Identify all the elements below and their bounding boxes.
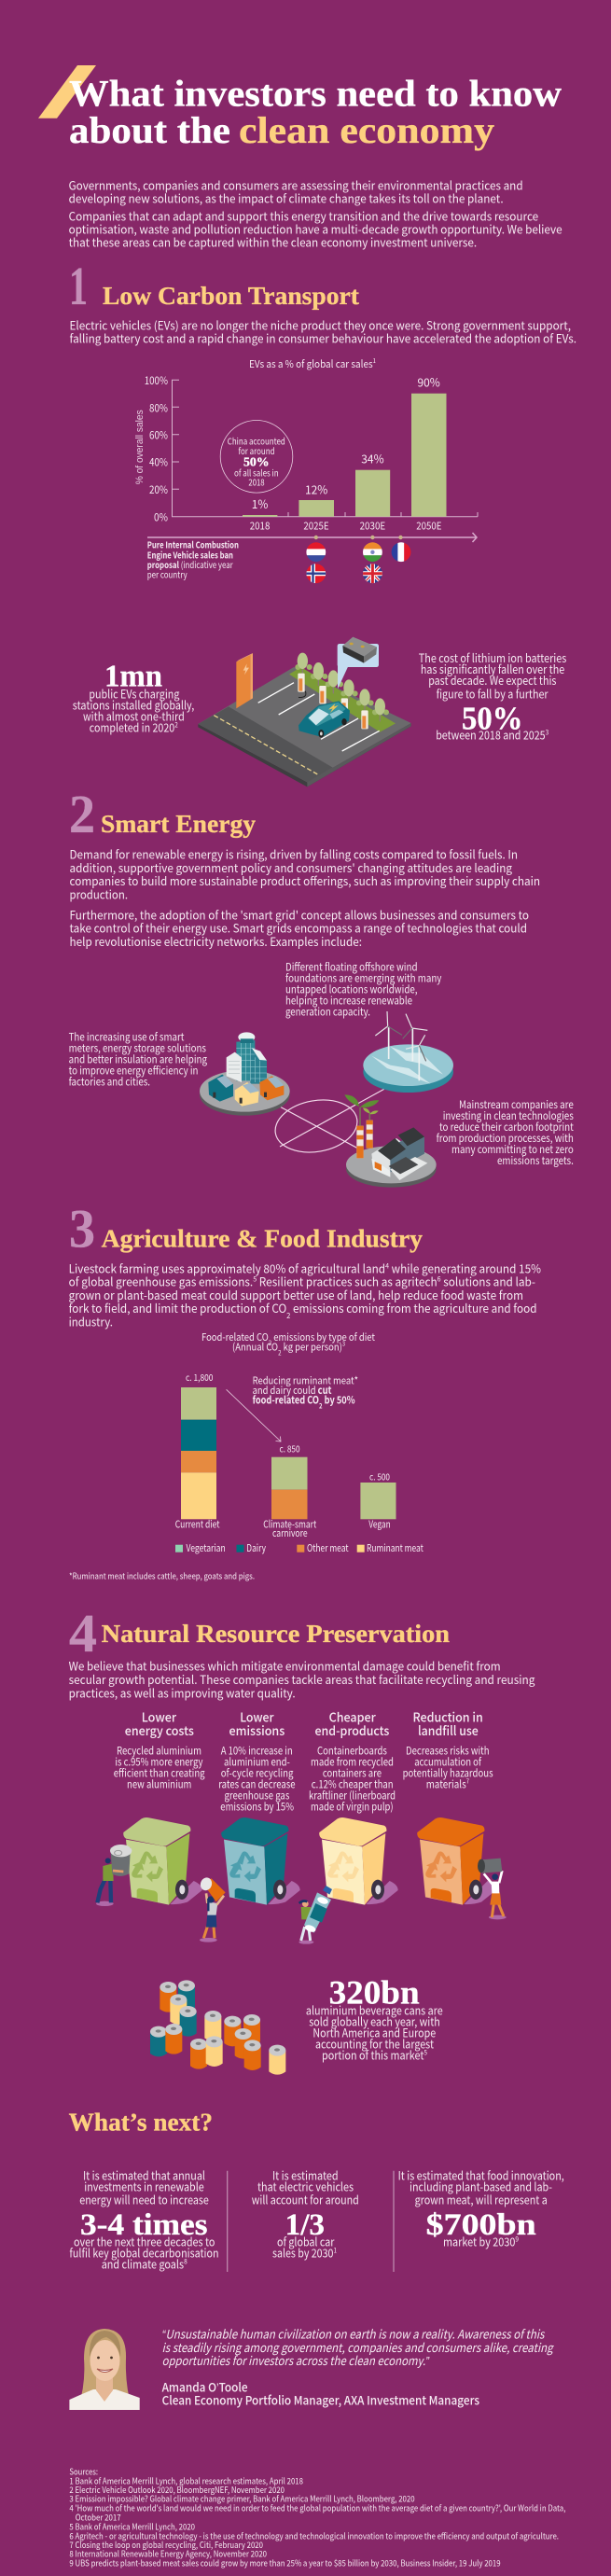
icon: person with grey can bbox=[478, 1859, 507, 1919]
callout: mainstream companies: to reduce their carbon footprint bbox=[439, 1120, 574, 1135]
y axis labels bbox=[145, 373, 168, 524]
ban proposal note: Engine Vehicle sales ban bbox=[147, 548, 233, 561]
quote: Amanda O’Toole bbox=[162, 2377, 248, 2395]
icon: orange bin bbox=[417, 1817, 496, 1905]
stat: beverage cans: sold globally each year, with bbox=[309, 2012, 440, 2029]
section text bbox=[69, 315, 576, 346]
callout: China share: 2018 bbox=[248, 476, 265, 489]
icon: drink cans bbox=[150, 1980, 285, 2075]
sources bbox=[69, 2465, 565, 2569]
column: food innovation: including plant-based and lab- bbox=[410, 2178, 552, 2195]
section text: Furthermore, the adoption of the 'smart grid' concept allows businesses and consumers to bbox=[69, 906, 529, 924]
stat: battery cost bbox=[419, 648, 566, 743]
column: food innovation: It is estimated that food innovation, bbox=[398, 2166, 564, 2184]
callout: China share bbox=[220, 420, 293, 493]
callout: mainstream companies bbox=[437, 1097, 574, 1168]
callout: offshore wind: helping to increase renewable bbox=[285, 993, 412, 1008]
section text: We believe that businesses which mitigate environmental damage could benefit from bbox=[69, 1657, 501, 1675]
column: reduction in landfill use: landfill use bbox=[418, 1720, 479, 1739]
sources: October 2017 bbox=[76, 2512, 121, 2524]
callout: China share: of all sales in bbox=[234, 466, 279, 479]
title slash bbox=[38, 65, 96, 118]
section 1: low carbon transport bbox=[69, 256, 576, 2569]
section 3: agriculture and food bbox=[69, 1199, 541, 1581]
bar values: 90% bbox=[418, 372, 440, 390]
column: cheaper end-products bbox=[309, 1707, 396, 1815]
flag: Netherlands bbox=[306, 542, 326, 563]
column: lower energy costs bbox=[114, 1707, 205, 1792]
header bbox=[38, 65, 562, 251]
column: food innovation: $700bn bbox=[426, 2208, 536, 2242]
column: cheaper end-products: c.12% cheaper than bbox=[312, 1777, 394, 1792]
callout: smart meters: meters, energy storage solutions bbox=[69, 1041, 206, 1056]
column: reduction in landfill use: Reduction in bbox=[412, 1707, 483, 1726]
bar: vegan bbox=[360, 1483, 396, 1519]
column: cheaper end-products: containers are bbox=[323, 1766, 382, 1781]
axes bbox=[172, 380, 478, 517]
column: lower emissions: greenhouse gas bbox=[224, 1789, 289, 1803]
intro text bbox=[69, 175, 562, 251]
icon: person with can bbox=[96, 1845, 132, 1906]
stat: charging stations: with almost one-third bbox=[83, 706, 185, 724]
city disc bbox=[200, 1032, 290, 1116]
column: reduction in landfill use bbox=[403, 1707, 493, 1792]
callout: offshore wind: generation capacity. bbox=[285, 1004, 370, 1019]
callout: China share: 50% bbox=[243, 456, 270, 470]
section number 1: 1 bbox=[69, 256, 88, 316]
column: reduction in landfill use: accumulation of bbox=[414, 1755, 482, 1770]
stat: charging stations: 1mn bbox=[104, 660, 162, 694]
bar labels: Current diet bbox=[175, 1517, 220, 1532]
column: lower energy costs: new aluminium bbox=[127, 1777, 191, 1792]
intro text: that these areas can be captured within the clean economy investment universe. bbox=[69, 233, 477, 251]
column: lower energy costs: efficient than creating bbox=[114, 1766, 205, 1781]
stat: charging stations: public EVs charging bbox=[89, 684, 179, 702]
ban proposal note: per country bbox=[147, 568, 187, 581]
callout: smart meters: to improve energy efficiency in bbox=[69, 1064, 198, 1079]
year labels: 2018 bbox=[250, 518, 270, 533]
column: lower emissions: rates can decrease bbox=[218, 1777, 296, 1792]
sources: 3 Emission impossible? Global climate change primer, Bank of America Merrill Lynch, Bloomberg, 2020 bbox=[69, 2493, 415, 2505]
callout: mainstream companies: emissions targets. bbox=[497, 1153, 574, 1168]
column: lower emissions bbox=[218, 1707, 296, 1815]
column: cheaper end-products: end-products bbox=[315, 1720, 389, 1739]
timeline arrow bbox=[147, 533, 477, 542]
stat: battery cost: 50% bbox=[462, 700, 522, 736]
flag: France bbox=[391, 542, 411, 563]
section heading: Low Carbon Transport bbox=[103, 282, 359, 310]
connecting lines bbox=[271, 1089, 384, 1159]
chart title: (Annual CO2 kg per person)3 bbox=[232, 1339, 345, 1358]
stat: charging stations: stations installed globally, bbox=[73, 695, 194, 713]
sources: 8 International Renewable Energy Agency, November 2020 bbox=[69, 2548, 267, 2560]
callout: mainstream companies: investing in clean technologies bbox=[443, 1108, 574, 1123]
section text: production. bbox=[69, 884, 128, 902]
section text: Electric vehicles (EVs) are no longer the niche product they once were. Strong government support, bbox=[69, 315, 571, 333]
sources: 2 Electric Vehicle Outlook 2020, BloombergNEF, November 2020 bbox=[69, 2484, 285, 2496]
section text bbox=[69, 845, 540, 950]
annotation bbox=[253, 1372, 358, 1412]
section 4: natural resource preservation bbox=[69, 1603, 535, 2075]
quote: is steadily rising among government, companies and consumers alike, creating bbox=[162, 2338, 554, 2356]
callout: offshore wind bbox=[285, 959, 441, 1019]
column: lower energy costs: energy costs bbox=[125, 1720, 194, 1739]
column: electric vehicles: sales by 20301 bbox=[272, 2244, 337, 2262]
section number 3: 3 bbox=[69, 1199, 95, 1260]
quote: “Unsustainable human civilization on earth is now a reality. Awareness of this bbox=[162, 2325, 546, 2343]
section text bbox=[69, 1260, 541, 1330]
quote bbox=[162, 2325, 554, 2408]
illustration: EV car park bbox=[198, 637, 411, 787]
legend: Other meat bbox=[307, 1540, 349, 1555]
column: lower energy costs: Lower bbox=[142, 1707, 176, 1726]
bar: current diet bbox=[181, 1387, 216, 1519]
section text: help revolutionise electricity networks. Examples include: bbox=[69, 932, 362, 950]
section text: practices, as well as improving water quality. bbox=[69, 1683, 296, 1701]
intro text: optimisation, waste and pollution reduction have a multi-decade growth opportunity. We believe bbox=[69, 220, 562, 238]
year labels: 2030E bbox=[360, 518, 385, 533]
column: cheaper end-products: Containerboards bbox=[317, 1743, 387, 1758]
callout: offshore wind: Different floating offshore wind bbox=[285, 959, 418, 974]
column: reduction in landfill use: materials7 bbox=[426, 1776, 469, 1792]
callout: smart meters: The increasing use of smart bbox=[69, 1030, 185, 1045]
column: lower emissions: emissions by 15% bbox=[220, 1800, 294, 1815]
title: about the bbox=[69, 109, 230, 151]
intro text: developing new solutions, as the impact of climate change takes its toll on the planet. bbox=[69, 188, 504, 206]
title bbox=[69, 72, 562, 151]
year labels: 2025E bbox=[303, 518, 329, 533]
section text: Demand for renewable energy is rising, driven by falling costs compared to fossil fuels. In bbox=[69, 845, 518, 863]
factory disc bbox=[344, 1094, 437, 1188]
stat: charging stations bbox=[73, 660, 194, 735]
quote: Clean Economy Portfolio Manager, AXA Investment Managers bbox=[162, 2390, 479, 2408]
section text: companies to build more sustainable product offerings, such as improving their supply chain bbox=[69, 871, 540, 889]
callout: offshore wind: untapped locations worldwide, bbox=[285, 982, 418, 996]
callout: mainstream companies: from production processes, with bbox=[437, 1131, 574, 1146]
callout: mainstream companies: many committing to net zero bbox=[451, 1142, 574, 1157]
bar values bbox=[186, 1371, 390, 1483]
ban proposal note: proposal (indicative year bbox=[147, 558, 233, 571]
year labels bbox=[250, 518, 441, 533]
bar values: c. 850 bbox=[280, 1442, 300, 1455]
callout: China share: China accounted bbox=[228, 435, 285, 448]
column: lower emissions: Lower bbox=[240, 1707, 274, 1726]
column: cheaper end-products: kraftliner (linerboard bbox=[309, 1789, 396, 1803]
ban proposal note bbox=[147, 537, 239, 581]
column: cheaper end-products: made of virgin pulp) bbox=[311, 1800, 394, 1815]
flag: United Kingdom bbox=[363, 564, 383, 584]
column: electric vehicles bbox=[252, 2166, 359, 2262]
column: lower emissions: emissions bbox=[229, 1720, 285, 1739]
bar chart: EVs share of car sales bbox=[134, 355, 478, 584]
stat: beverage cans: portion of this market5 bbox=[322, 2045, 427, 2063]
annotation: food-related CO2 by 50% bbox=[253, 1393, 355, 1412]
column: renewable investment: fulfil key global decarbonisation bbox=[69, 2244, 219, 2262]
bar values: 12% bbox=[305, 480, 328, 497]
section text: fork to field, and limit the production of CO2 emissions coming from the agriculture and food bbox=[69, 1299, 536, 1321]
y axis labels: 60% bbox=[149, 427, 168, 442]
section: what's next bbox=[69, 2108, 564, 2273]
stat: beverage cans: 320bn bbox=[329, 1973, 420, 2011]
column: renewable investment: It is estimated that annual bbox=[83, 2166, 205, 2184]
column: electric vehicles: 1/3 bbox=[285, 2208, 325, 2242]
section heading: Agriculture & Food Industry bbox=[102, 1225, 424, 1253]
icon: teal bin bbox=[221, 1817, 300, 1905]
section number 4: 4 bbox=[69, 1603, 97, 1664]
footnote: *Ruminant meat includes cattle, sheep, goats and pigs. bbox=[69, 1569, 255, 1581]
stat: beverage cans: aluminium beverage cans are bbox=[306, 2000, 443, 2018]
column: electric vehicles: of global car bbox=[277, 2232, 335, 2249]
bar values: 34% bbox=[361, 449, 384, 466]
stat: battery cost: figure to fall by a further bbox=[437, 684, 549, 702]
column: lower emissions: aluminium end- bbox=[224, 1755, 290, 1770]
y axis title: % of overall sales bbox=[134, 410, 146, 484]
y axis labels: 0% bbox=[154, 509, 168, 524]
icon: person with bottle bbox=[299, 1886, 332, 1944]
column: renewable investment bbox=[69, 2166, 219, 2273]
y axis labels: 80% bbox=[149, 401, 168, 416]
section text: of global greenhouse gas emissions.5 Resilient practices such as agritech6 solutions and lab- bbox=[69, 1273, 535, 1290]
callout: mainstream companies: Mainstream companies are bbox=[459, 1097, 574, 1112]
sources: Sources: bbox=[69, 2465, 98, 2477]
bar values bbox=[252, 372, 440, 512]
column: reduction in landfill use: Decreases risks with bbox=[406, 1743, 490, 1758]
section text: grown or plant-based meat could support better use of land, help reduce food waste from bbox=[69, 1286, 523, 1303]
icon: person with orange can bbox=[199, 1876, 226, 1942]
column: reduction in landfill use: potentially hazardous bbox=[403, 1766, 493, 1781]
icon: yellow bin bbox=[319, 1817, 398, 1905]
column: lower emissions: of-cycle recycling bbox=[221, 1766, 294, 1781]
flag: Norway bbox=[306, 564, 326, 584]
section text: addition, supportive government policy and consumers' changing attitudes are leading bbox=[69, 858, 512, 876]
illustration: smart grid bbox=[200, 1011, 453, 1188]
stat: beverage cans: North America and Europe bbox=[312, 2023, 436, 2040]
callout: China share: for around bbox=[239, 444, 275, 457]
stat: battery cost: The cost of lithium ion batteries bbox=[419, 648, 566, 666]
bars bbox=[243, 394, 446, 517]
bar labels: carnivore bbox=[272, 1525, 308, 1540]
column: lower energy costs: is c.95% more energy bbox=[115, 1755, 203, 1770]
column: renewable investment: energy will need to increase bbox=[79, 2191, 209, 2208]
annotation: and dairy could cut bbox=[253, 1383, 332, 1398]
column: renewable investment: investments in renewable bbox=[84, 2178, 204, 2195]
icon: green bin bbox=[123, 1817, 202, 1905]
stat: battery cost: has significantly fallen over the bbox=[421, 660, 564, 677]
callout: smart meters: factories and cities. bbox=[69, 1074, 150, 1089]
intro text: Companies that can adapt and support this energy transition and the drive towards resource bbox=[69, 207, 538, 225]
stat: beverage cans bbox=[306, 1973, 443, 2063]
column: electric vehicles: that electric vehicles bbox=[257, 2178, 354, 2195]
bar values: 1% bbox=[252, 494, 269, 512]
sources: 9 UBS predicts plant-based meat sales could grow by more than 25% a year to $85 billion by 2030, Business Insider, 19 July 2019 bbox=[69, 2556, 501, 2569]
section number 2: 2 bbox=[69, 784, 95, 844]
section text: industry. bbox=[69, 1312, 113, 1330]
heading: What’s next? bbox=[69, 2108, 213, 2136]
legend: Vegetarian bbox=[187, 1540, 226, 1555]
y axis labels: 20% bbox=[149, 482, 168, 497]
chart title bbox=[201, 1330, 375, 1358]
callout: smart meters: and better insulation are helping bbox=[69, 1052, 207, 1067]
legend: Ruminant meat bbox=[367, 1540, 424, 1555]
legend bbox=[175, 1540, 424, 1555]
column: cheaper end-products: made from recycled bbox=[311, 1755, 394, 1770]
stat: battery cost: past decade. We expect this bbox=[428, 671, 557, 689]
column: food innovation bbox=[398, 2166, 564, 2249]
arrow bbox=[227, 1389, 281, 1441]
intro text: Governments, companies and consumers are assessing their environmental practices and bbox=[69, 175, 523, 193]
title: What investors need to know bbox=[69, 72, 562, 114]
stacked bar chart: diet emissions bbox=[69, 1330, 424, 1581]
section text: Livestock farming uses approximately 80% of agricultural land4 while generating around 15% bbox=[69, 1260, 541, 1277]
column: food innovation: market by 20309 bbox=[443, 2232, 519, 2249]
chart title: Food-related CO2 emissions by type of diet bbox=[201, 1330, 375, 1348]
bar values: c. 1,800 bbox=[186, 1371, 213, 1384]
annotation: Reducing ruminant meat* bbox=[253, 1372, 358, 1387]
section heading: Natural Resource Preservation bbox=[102, 1620, 450, 1648]
column dividers bbox=[228, 2171, 394, 2272]
stat: battery cost: between 2018 and 20253 bbox=[436, 725, 549, 743]
wind farm disc bbox=[363, 1011, 453, 1093]
sources: 1 Bank of America Merrill Lynch, global research estimates, April 2018 bbox=[69, 2474, 303, 2486]
section text bbox=[69, 1657, 535, 1701]
column: lower energy costs: Recycled aluminium bbox=[117, 1743, 201, 1758]
section text: falling battery cost and a rapid change in consumer behaviour have accelerated the adoption of EVs. bbox=[69, 328, 576, 346]
callout: offshore wind: foundations are emerging with many bbox=[285, 970, 441, 985]
bar labels bbox=[175, 1517, 391, 1540]
y axis labels: 40% bbox=[149, 455, 168, 470]
sources: 5 Bank of America Merrill Lynch, 2020 bbox=[69, 2520, 195, 2532]
column: renewable investment: 3-4 times bbox=[80, 2208, 208, 2242]
legend: Dairy bbox=[246, 1540, 266, 1555]
stat: beverage cans: accounting for the largest bbox=[315, 2034, 434, 2052]
section text: secular growth potential. These companies tackle areas that facilitate recycling and reusing bbox=[69, 1670, 535, 1688]
title: clean economy bbox=[239, 109, 494, 151]
bar labels: Climate-smart bbox=[263, 1517, 316, 1532]
section heading: Smart Energy bbox=[101, 810, 257, 838]
quote: opportunities for investors across the clean economy.” bbox=[162, 2351, 430, 2369]
sources: 7 Closing the loop on global recycling, Citi, February 2020 bbox=[69, 2539, 263, 2551]
column: electric vehicles: It is estimated bbox=[272, 2166, 339, 2184]
bar labels: Vegan bbox=[368, 1517, 391, 1532]
section 2: smart energy bbox=[69, 784, 574, 1188]
column: electric vehicles: will account for around bbox=[252, 2191, 359, 2208]
column: lower emissions: A 10% increase in bbox=[221, 1743, 293, 1758]
year labels: 2050E bbox=[416, 518, 441, 533]
column: food innovation: grown meat, will represent a bbox=[415, 2191, 548, 2208]
y axis labels: 100% bbox=[145, 373, 168, 388]
bar values: c. 500 bbox=[369, 1469, 390, 1483]
callout: smart meters bbox=[69, 1030, 207, 1089]
chart title: EVs as a % of global car sales1 bbox=[249, 355, 376, 371]
stat: charging stations: completed in 20202 bbox=[90, 717, 178, 735]
column: renewable investment: and climate goals8 bbox=[102, 2255, 187, 2273]
portrait: Amanda O'Toole bbox=[69, 2329, 140, 2410]
ban proposal note: Pure Internal Combustion bbox=[147, 537, 239, 550]
bar: climate-smart carnivore bbox=[271, 1457, 308, 1519]
flag: India bbox=[363, 542, 383, 563]
section text: take control of their energy use. Smart grids encompass a range of technologies that could bbox=[69, 919, 527, 937]
column: cheaper end-products: Cheaper bbox=[329, 1707, 376, 1726]
column: renewable investment: over the next three decades to bbox=[74, 2232, 215, 2249]
